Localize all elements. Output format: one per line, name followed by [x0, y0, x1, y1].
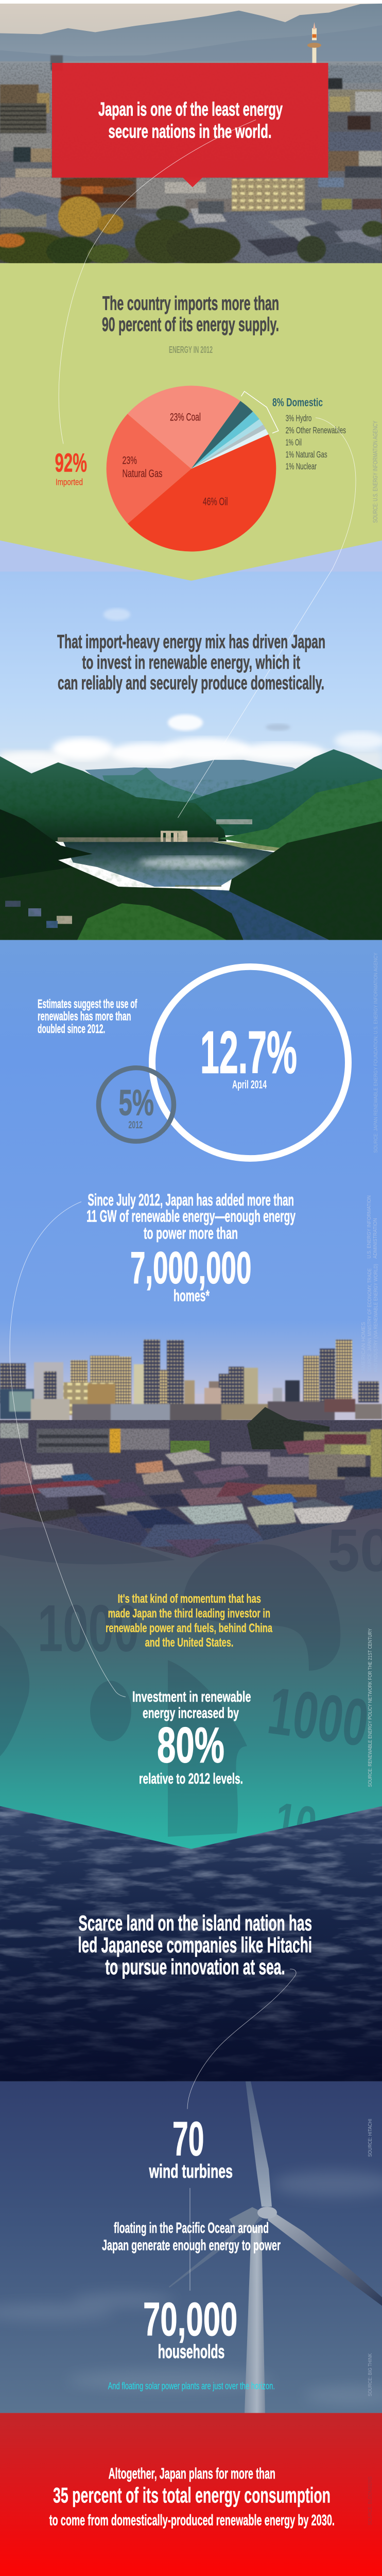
domestic legend: 1% Nuclear [286, 461, 317, 471]
trees [0, 196, 382, 267]
big number: 7,000,000 homes: 7,000,000 [130, 1242, 251, 1293]
text: third leading investor: made Japan the third leading investor in [108, 1607, 270, 1620]
banknote denominations: 1000 [38, 1591, 139, 1665]
left dark hill [0, 809, 93, 882]
circle: 5 percent 2012: 5% [118, 1083, 154, 1123]
big number: 80 percent investment [132, 1689, 251, 1787]
right mountain [185, 749, 382, 835]
teal gradient [0, 1510, 382, 1852]
heading: innovation at sea [78, 1911, 312, 1979]
shoreline grass [214, 841, 284, 852]
domestic legend: 1% Oil [286, 437, 302, 447]
photo grain [0, 63, 382, 263]
chart: pie of energy sources [107, 386, 276, 551]
cloud reflection [139, 856, 247, 869]
big number: 70 wind turbines: 70 [172, 2112, 204, 2166]
pie labels [123, 411, 228, 508]
big number: 70,000 households: 70,000 [143, 2293, 237, 2346]
text: 11 GW added: to power more than [144, 1224, 238, 1242]
pie labels: Natural Gas [123, 467, 163, 480]
right lit hill [219, 778, 382, 850]
text: estimates: doubled since 2012. [38, 1022, 105, 1036]
lake sky [0, 571, 382, 783]
big number: 70,000 households: households [158, 2341, 224, 2362]
sources: homes: *AMERICAN HOMES [361, 1322, 367, 1374]
banknote denominations [38, 1517, 382, 1853]
panel: Tokyo skyline photo [0, 1340, 382, 1561]
foreground valley [0, 867, 244, 940]
connector line from homes to investment [10, 1201, 126, 1697]
mid-rise belt [0, 1382, 382, 1423]
panel: ocean [0, 1797, 382, 2081]
source: investment: SOURCE: RENEWABLE ENERGY POLICY NETWORK FOR THE 21ST CENTURY [368, 1629, 373, 1787]
circle: 12.7 percent April 2014 [152, 967, 348, 1158]
text: third leading investor: renewable power and fuels, behind China [106, 1621, 272, 1635]
big number: 7,000,000 homes: homes* [173, 1286, 210, 1305]
big number: 80 percent investment: relative to 2012 levels. [139, 1771, 243, 1787]
city base [0, 61, 382, 263]
right houses [221, 1429, 382, 1497]
pie labels: 23% [123, 454, 137, 467]
source: energy mix: SOURCE: U.S. ENERGY INFORMATION AGENCY [373, 420, 379, 523]
slice: natural gas [107, 414, 192, 523]
depth shade [0, 1797, 382, 2081]
domestic legend: 8% Domestic [272, 396, 323, 409]
big number: 80 percent investment: Investment in renewable [132, 1689, 251, 1705]
text: floating in the Pacific [102, 2221, 281, 2253]
left mountains [0, 756, 227, 841]
panel: yen banknote investment [0, 1510, 382, 1853]
big number: 80 percent investment: energy increased by [143, 1705, 239, 1722]
dark trees [247, 1407, 329, 1449]
text: floating in the Pacific: Japan generate enough energy to power [102, 2238, 281, 2253]
red box with pointer [52, 63, 328, 187]
lavender band above lake [0, 540, 382, 572]
Kyoto Tower [307, 22, 321, 64]
neighbourhood base [0, 1420, 382, 1561]
far mountains [85, 759, 296, 796]
big number: 70,000 households [143, 2293, 237, 2362]
panel: Kyoto skyline hero [0, 4, 382, 267]
upper blade [246, 2081, 272, 2207]
distant haze [0, 1394, 382, 1424]
sources: turbines: SOURCE: BIG THINK [368, 2353, 373, 2396]
rice fields [77, 903, 227, 940]
imported total [55, 448, 87, 487]
text: third leading investor: and the United States. [145, 1636, 233, 1650]
house roofs [0, 1449, 382, 1558]
panel: blue renewables sky [0, 940, 382, 1403]
turbine tower [245, 2227, 265, 2413]
imported total: Imported [56, 477, 83, 487]
sources: homes [361, 1195, 379, 1374]
river [190, 889, 329, 940]
far mountains [0, 4, 382, 62]
circle: 12.7 percent April 2014: April 2014 [232, 1078, 267, 1091]
pie labels: 46% Oil [203, 495, 228, 508]
text: estimates: Estimates suggest the use of [38, 997, 137, 1011]
text: floating in the Pacific: floating in the Pacific Ocean around [114, 2221, 269, 2236]
dam wall [58, 837, 218, 842]
title [98, 98, 283, 142]
wispy clouds [0, 2171, 382, 2404]
banknote portraits [0, 1527, 340, 1837]
text: third leading investor [106, 1592, 272, 1650]
imported total: 92% [55, 448, 87, 478]
callout: red title box [52, 63, 328, 187]
lower city band [0, 178, 382, 231]
connector line from chart to lake [178, 418, 356, 818]
banknote denominations: 10 [271, 1792, 320, 1853]
circle: 12.7 percent April 2014: 12.7% [200, 1019, 297, 1086]
source: conclusion: SOURCE: BLOOMBERG [368, 2477, 373, 2525]
right blade [268, 2210, 382, 2306]
slice: other renewables [192, 412, 259, 469]
connector line from hero to chart [59, 120, 256, 444]
connector line: turbines to households [189, 2188, 190, 2291]
right dark forest [229, 821, 382, 940]
slice: coal [128, 386, 240, 469]
text: estimates: renewables has more than [38, 1010, 131, 1023]
text: estimates [38, 997, 137, 1036]
wave texture [0, 1797, 382, 2081]
slice: hydro [192, 401, 253, 469]
circle: 5 percent 2012: 2012 [128, 1119, 143, 1131]
sports field [170, 1440, 210, 1453]
bracket for domestic slices [241, 392, 279, 433]
left tower block [0, 55, 63, 180]
bridge [175, 885, 221, 887]
slice: oil [128, 434, 276, 551]
rooftops [0, 195, 382, 263]
apartment block [0, 1423, 169, 1453]
chart subtitle: ENERGY IN 2012 [169, 344, 213, 355]
domestic legend [272, 396, 346, 471]
text: floating solar: And floating solar power plants are just over the horizon. [108, 2381, 275, 2392]
sources: turbines: SOURCE: HITACHI [368, 2119, 373, 2157]
wind sky gradient [0, 2081, 382, 2413]
text: third leading investor: It's that kind of momentum that has [118, 1592, 261, 1606]
nacelle and hub [229, 2207, 277, 2227]
domestic legend: 3% Hydro [286, 413, 311, 423]
circle: 5 percent 2012 [99, 1068, 174, 1141]
big number: 70 wind turbines: wind turbines [149, 2160, 233, 2182]
big number: 80 percent investment: 80% [157, 1717, 224, 1773]
text: conclusion [49, 2465, 335, 2529]
big number: 70 wind turbines [149, 2112, 233, 2182]
sources: homes: SOURCE: JAPAN MINISTRY OF ECONOMY, TRADE [367, 1268, 373, 1372]
source: renewables share: SOURCE: JAPAN RENEWABLE ENERGY FOUNDATION; U.S. ENERGY INFORMATION AGENCY [373, 953, 379, 1153]
faint rear blade [169, 2214, 263, 2287]
photo grain [0, 1420, 382, 1558]
panel: wind turbine sky [0, 2081, 382, 2413]
sources: homes: AND INDUSTRY (VIA RENEWABLE ENERGY WORLD) [373, 1264, 379, 1372]
town in valley [216, 819, 252, 824]
text: 11 GW added [86, 1190, 296, 1242]
domestic legend: 2% Other Renewables [286, 425, 346, 435]
sources: homes: U.S. ENERGY INFORMATION [367, 1195, 372, 1259]
right city block [328, 65, 382, 179]
clouds [0, 608, 382, 779]
big number: 7,000,000 homes [130, 1242, 251, 1305]
mid peak [102, 768, 202, 805]
title: secure nations in the world. [109, 121, 272, 142]
hero sky [0, 4, 378, 34]
high-rise towers [0, 1340, 379, 1412]
text: conclusion: Altogether, Japan plans for more than [109, 2465, 275, 2482]
dam gates [161, 831, 187, 842]
forest texture [0, 780, 382, 940]
panel: red conclusion [0, 2413, 382, 2576]
slice: nuclear [192, 429, 269, 469]
slice: domestic natural gas [192, 425, 266, 469]
sources: turbines [368, 2119, 373, 2396]
slice: domestic oil [192, 419, 263, 469]
nearer ridge [0, 40, 382, 61]
lake [63, 842, 278, 887]
heading: imports [102, 293, 279, 336]
village houses [5, 901, 72, 928]
panel: green energy mix [0, 263, 382, 581]
connector line from sea to turbines [187, 1969, 296, 2109]
panel: lake and dam photo backdrop [0, 571, 382, 940]
domestic legend: 1% Natural Gas [286, 449, 327, 460]
ocean base [0, 1797, 382, 2081]
pie labels: 23% Coal [170, 411, 201, 423]
sources: homes: ADMINISTRATION [373, 1218, 378, 1259]
heading: import-heavy mix [57, 631, 325, 693]
